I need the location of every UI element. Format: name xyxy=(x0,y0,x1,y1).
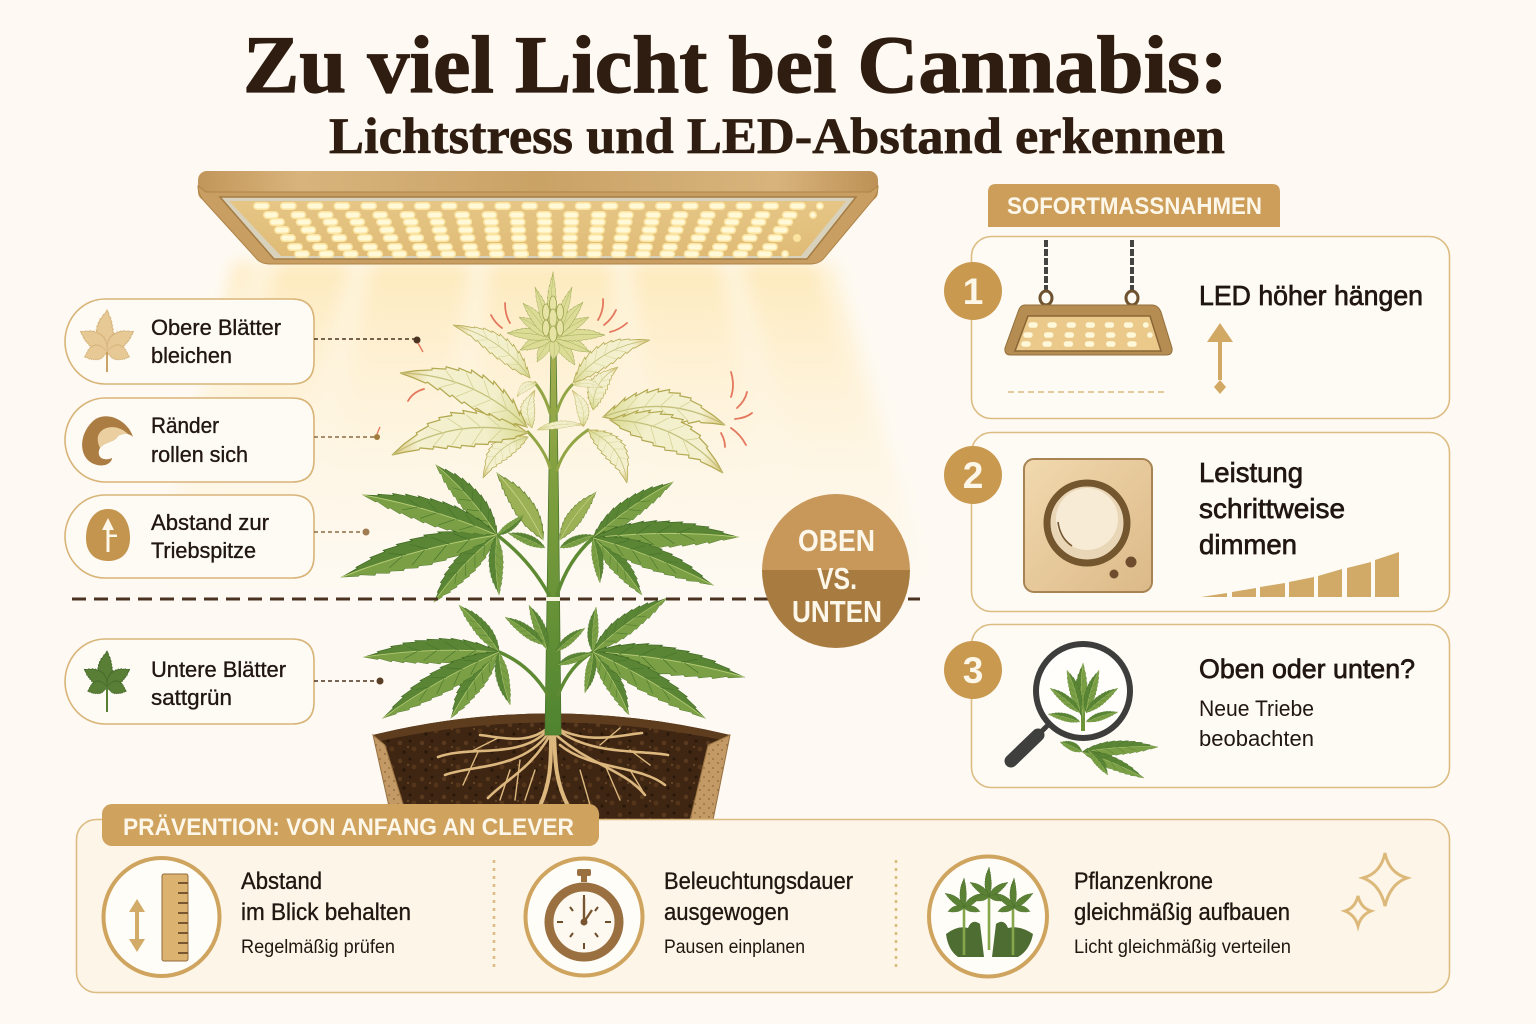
badge 2: 2 xyxy=(963,455,983,496)
callout: obere Blätter bleichen xyxy=(65,299,314,384)
panel: step 2: schrittweise xyxy=(1199,493,1345,524)
item: lighting duration: ausgewogen xyxy=(664,899,789,926)
item: canopy xyxy=(929,856,1291,976)
item: lighting duration: Beleuchtungsdauer xyxy=(664,868,853,895)
item: canopy: gleichmäßig aufbauen xyxy=(1074,899,1290,926)
badge: oben vs unten: VS. xyxy=(817,561,857,596)
icon: even canopy plants xyxy=(929,856,1047,976)
leader 1 xyxy=(314,336,423,352)
item: distance: Abstand xyxy=(241,868,322,895)
item: lighting duration: Pausen einplanen xyxy=(664,937,805,958)
LED lamp xyxy=(198,171,878,264)
badge 1 xyxy=(944,262,1002,320)
panel: step 1: LED höher hängen xyxy=(1199,280,1423,311)
icon: stopwatch xyxy=(526,858,642,976)
tab: Sofortmassnahmen xyxy=(988,184,1280,227)
arrow up xyxy=(1207,323,1233,394)
stem xyxy=(545,345,561,735)
item: distance: im Blick behalten xyxy=(241,899,411,926)
branch stems xyxy=(497,383,593,695)
reference line xyxy=(1008,391,1168,393)
callout: untere Blätter sattgrün xyxy=(65,639,314,724)
icon: curled leaf xyxy=(82,416,133,465)
callout: Ränder rollen sich xyxy=(65,398,314,482)
pot with soil xyxy=(373,714,730,820)
callout: untere Blätter sattgrün: Untere Blätter xyxy=(151,657,286,682)
item: canopy: Pflanzenkrone xyxy=(1074,868,1213,895)
badge: oben vs unten: OBEN xyxy=(798,523,875,558)
dimming step bars xyxy=(1201,552,1399,597)
callout: Abstand zur Triebspitze xyxy=(65,495,314,578)
item: lighting duration xyxy=(526,858,853,976)
leader 2 xyxy=(314,427,380,440)
leader 4 xyxy=(314,678,384,684)
panel: step 2: dimmen xyxy=(1199,529,1297,560)
top bud xyxy=(507,272,605,368)
upper green fan leaves xyxy=(337,456,738,608)
callout: Ränder rollen sich: rollen sich xyxy=(151,442,248,467)
tab: prevention heading: PRÄVENTION: VON ANFANG AN CLEVER xyxy=(123,814,574,841)
roots xyxy=(438,718,668,806)
badge 3: 3 xyxy=(963,650,983,691)
subtitle: Lichtstress und LED-Abstand erkennen xyxy=(329,109,1225,165)
panel: prevention xyxy=(76,804,1450,992)
divider top vs bottom xyxy=(72,597,920,601)
badge 1: 1 xyxy=(963,271,983,312)
plant xyxy=(337,272,752,735)
callout: obere Blätter bleichen: bleichen xyxy=(151,343,232,368)
item: distance xyxy=(104,858,411,976)
badge: oben vs unten: UNTEN xyxy=(792,594,882,629)
tab: Sofortmassnahmen: SOFORTMASSNAHMEN xyxy=(1007,193,1262,220)
icon: hanging lamp xyxy=(1005,240,1172,355)
leader 3 xyxy=(314,528,370,536)
pale bleached leaves xyxy=(387,309,736,485)
panel: step 3: Oben oder unten? xyxy=(1199,654,1415,684)
icon: ruler and arrow xyxy=(104,858,220,976)
panel: step 2 xyxy=(944,432,1450,612)
callout: Abstand zur Triebspitze: Abstand zur xyxy=(151,510,269,535)
icon: distance arrow xyxy=(86,509,130,561)
lower fan leaves xyxy=(363,588,747,726)
badge: oben vs unten xyxy=(762,494,910,648)
item: distance: Regelmäßig prüfen xyxy=(241,937,395,958)
icon: dimmer xyxy=(1024,459,1152,592)
callout: Abstand zur Triebspitze: Triebspitze xyxy=(151,538,256,563)
tab: prevention heading xyxy=(102,804,599,846)
icon: magnifier with plant xyxy=(1011,644,1158,783)
callout: Ränder rollen sich: Ränder xyxy=(151,413,219,438)
panel: step 2: Leistung xyxy=(1199,457,1303,488)
red stress marks xyxy=(408,299,752,447)
panel: step 1 xyxy=(944,236,1450,418)
icon: pale leaf xyxy=(77,310,137,372)
badge 3 xyxy=(944,641,1002,699)
panel: step 3: Neue Triebe xyxy=(1199,696,1314,721)
badge 2 xyxy=(944,446,1002,504)
icon: green leaf xyxy=(81,651,133,712)
item: canopy: Licht gleichmäßig verteilen xyxy=(1074,937,1291,958)
icon: sparkles xyxy=(1345,853,1407,926)
light glow below lamp xyxy=(150,262,930,590)
title: Zu viel Licht bei Cannabis: xyxy=(243,19,1228,110)
panel: step 3: beobachten xyxy=(1199,726,1314,751)
callout: obere Blätter bleichen: Obere Blätter xyxy=(151,315,281,340)
callout: untere Blätter sattgrün: sattgrün xyxy=(151,685,232,710)
panel: step 3 xyxy=(944,624,1450,788)
